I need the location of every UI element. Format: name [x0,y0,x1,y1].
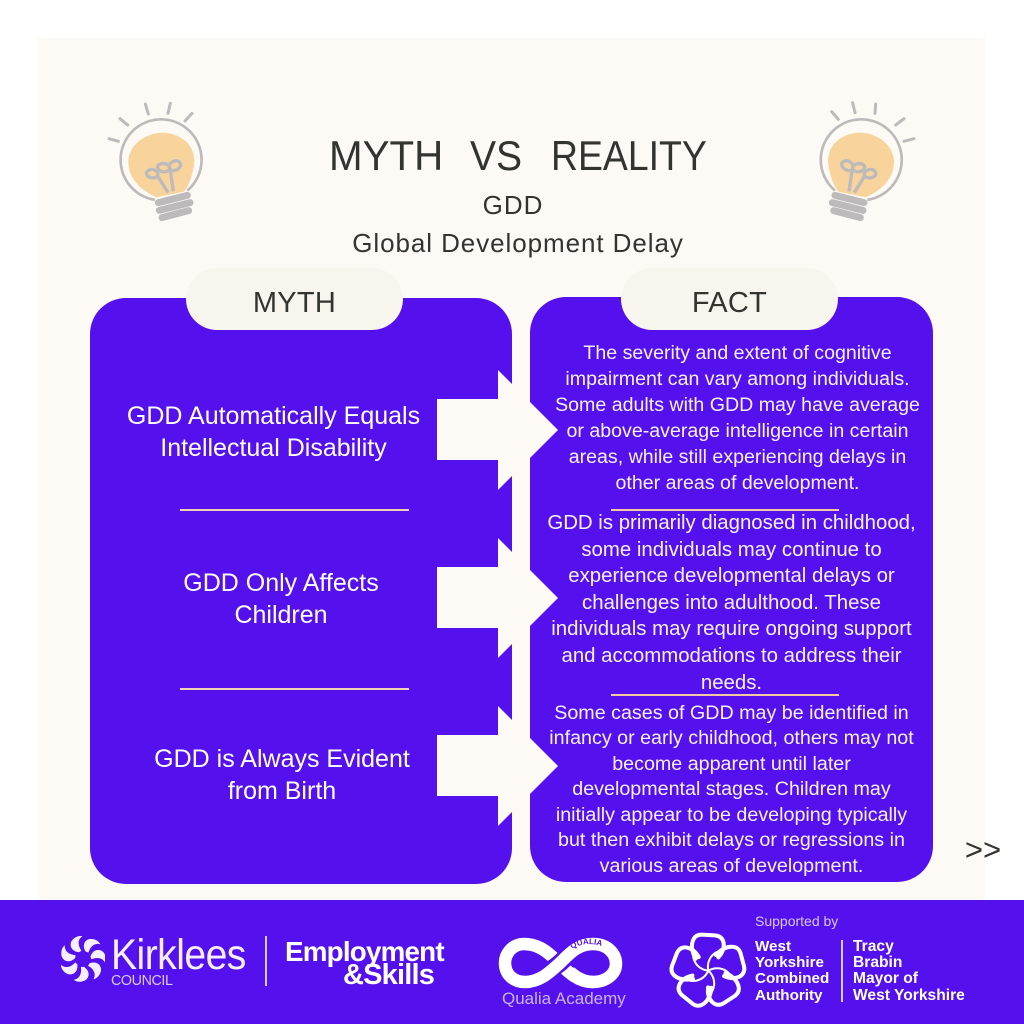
fact text 1: or above-average intelligence in certain [566,420,908,442]
myth statement 1: Intellectual Disability [160,434,387,462]
fact text 1: areas, while still experiencing delays in [569,446,906,468]
arrow 1 [437,370,558,490]
fact text 1: impairment can vary among individuals. [565,368,910,390]
subtitle: GDD: GDD [483,190,543,220]
title: VS [470,132,522,179]
icon: left light bulb [108,102,203,222]
fact text 2: and accommodations to address their [561,645,902,667]
text: West Yorkshire Combined Authority: West [755,938,791,954]
fact text 2 [547,512,916,694]
fact text 1: The severity and extent of cognitive [583,342,892,364]
icon: infinity loop: QUALIA [570,938,602,948]
icon: rose emblem [669,932,746,1008]
fact text 3: become apparent until later [612,752,851,774]
arrow 3 [437,706,558,826]
icon: right light bulb [819,101,916,222]
title [329,132,707,179]
panel: myth [90,298,512,884]
fact text 3: initially appear to be developing typically [556,804,907,826]
fact text 3: developmental stages. Children may [572,778,891,800]
fact text 2: GDD is primarily diagnosed in childhood, [547,512,916,534]
text: Council: COUNCIL [111,973,173,989]
logo: West Yorkshire Combined Authority [669,913,965,1008]
myth statement 3 [154,745,410,805]
heading tab: fact: FACT [692,287,767,319]
text: Tracy Brabin Mayor of West Yorkshire: Mayor of [853,970,918,987]
background panel [38,38,985,900]
arrow 2 [437,538,558,658]
text: Employment: Employment [285,936,444,967]
fact text 3: infancy or early childhood, others may not [549,727,914,749]
logo: Qualia Academy [498,938,626,1008]
icon: Kirklees swirl [61,936,105,982]
text: West Yorkshire Combined Authority: Authority [755,987,822,1004]
fact text 2: experience developmental delays or [568,565,895,587]
logo: Employment and Skills [285,936,444,991]
fact text 2: individuals may require ongoing support [551,618,912,640]
fact text 3: various areas of development. [600,854,863,876]
heading tab: fact [621,268,838,330]
title: REALITY [551,132,707,179]
text: West Yorkshire Combined Authority: Yorkshire [755,954,824,971]
myth statement 2: GDD Only Affects [183,569,379,597]
text: Tracy Brabin Mayor of West Yorkshire: Tracy [853,938,894,954]
myth statement 3: GDD is Always Evident [154,745,410,773]
fact text 1: Some adults with GDD may have average [555,394,920,416]
myth statement 2 [183,569,379,629]
fact text 2: challenges into adulthood. These [582,592,881,614]
myth statement 3: from Birth [228,777,336,805]
fact text 1: other areas of development. [616,472,859,494]
text: Qualia Academy: Qualia Academy [502,989,626,1008]
myth statement 1 [127,402,420,462]
fact text 3 [549,702,914,876]
heading tab: myth: MYTH [253,287,336,319]
title: MYTH [329,132,443,179]
fact text 2: needs. [701,672,762,694]
myth statement 1: GDD Automatically Equals [127,402,420,430]
subtitle: Global Development Delay: Global Development Delay [352,228,684,258]
text: Kirklees: Kirklees [111,931,246,979]
myth statement 2: Children [234,601,328,629]
text: West Yorkshire Combined Authority [755,938,829,1004]
heading tab: myth [186,268,403,330]
text: West Yorkshire Combined Authority: Combined [755,970,829,987]
text: Tracy Brabin Mayor of West Yorkshire: Brabin [853,954,902,971]
fact text 3: but then exhibit delays or regressions in [558,829,905,851]
next page marker: >> [965,832,1001,867]
text: supported by: Supported by [755,913,838,929]
text: Tracy Brabin Mayor of West Yorkshire [853,938,965,1004]
footer band [0,900,1024,1024]
logo: Kirklees Council [61,931,246,989]
fact text 1 [555,342,920,494]
fact text 2: some individuals may continue to [581,539,882,561]
text: and Skills: &Skills [343,959,434,991]
icon: infinity loop [498,938,622,988]
text: Tracy Brabin Mayor of West Yorkshire: West Yorkshire [853,987,965,1004]
fact text 3: Some cases of GDD may be identified in [554,702,909,724]
panel: fact [530,297,933,882]
